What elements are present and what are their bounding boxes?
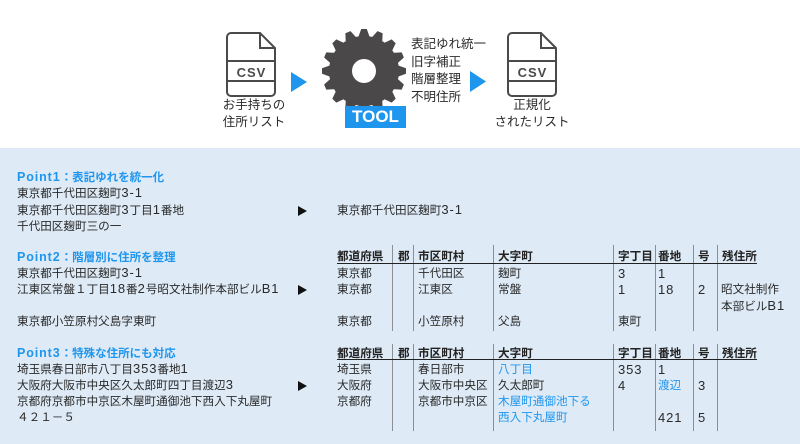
text: Point 2 third address: 東京都小笠原村父島字東町 (17, 315, 156, 328)
text: tool features: 表記ゆれ統一 (411, 37, 486, 51)
table: Point 3 result: 号 (698, 347, 710, 360)
table: Point 3 result: 1 (658, 362, 666, 377)
table: Point 2 result: 1 (618, 282, 626, 297)
text: Point 1 input addresses: 東京都千代田区麹町3-1 (17, 185, 143, 200)
label: TOOL (345, 106, 406, 128)
text: output caption: されたリスト (494, 115, 570, 129)
table: Point 3 result: 渡辺 (658, 379, 681, 392)
text: input caption (223, 98, 285, 129)
table: Point 3 result: 都道府県 (337, 347, 383, 360)
text: Point 1 input addresses: 千代田区麹町三の一 (17, 220, 121, 233)
table: Point 2 result: 1 (658, 266, 666, 281)
table: Point 3 result: 春日部市 (418, 363, 464, 376)
table: Point 3 result: 353 (618, 362, 642, 377)
table: Point 2 result: 都道府県 (337, 250, 383, 263)
table: Point 2 result: 父島 (498, 315, 521, 328)
table: Point 2 result (337, 245, 785, 331)
table: Point 3 result: 久太郎町 (498, 379, 544, 392)
text: Point 1 input addresses: 東京都千代田区麹町3丁目1番地 (17, 202, 184, 216)
table: Point 3 result: 木屋町通御池下る (498, 395, 591, 408)
icon: CSV output file: CSV (518, 65, 547, 80)
text: Point 1 result: 東京都千代田区麹町3-1 (337, 202, 463, 217)
table: Point 3 result: 4 (618, 378, 626, 393)
table: Point 2 result: 東京都 (337, 283, 372, 296)
section: Point 2 (17, 245, 785, 331)
table: Point 2 result: 常盤 (498, 283, 521, 296)
text: output caption (494, 98, 570, 129)
table: Point 2 result: 字丁目 (618, 250, 653, 263)
text: tool features: 不明住所 (411, 90, 461, 104)
icon: CSV output file (507, 32, 557, 97)
table: Point 2 result: 麹町 (498, 267, 521, 280)
table: Point 2 result: 2 (698, 282, 706, 297)
table: Point 3 result: 八丁目 (498, 363, 533, 376)
section: Point 1 (17, 170, 463, 233)
text: Point 2 second address: 江東区常盤１丁目18番2号昭文社制作本部ビルB1 (17, 281, 279, 296)
arrow: Point 3 (298, 381, 307, 391)
icon: CSV input file (226, 32, 276, 97)
table: Point 3 result: 市区町村 (418, 347, 464, 360)
table: Point 2 result: 残住所 (722, 250, 757, 263)
panel: blue background band (0, 148, 800, 444)
section: Point 3 (17, 344, 757, 431)
text: Point 3 input addresses: ４２１－５ (17, 411, 75, 424)
table: Point 3 result: 京都府 (337, 395, 372, 408)
table: Point 3 result: 郡 (398, 347, 410, 360)
table: Point 2 result: 千代田区 (418, 267, 464, 280)
arrow: Point 2 (298, 285, 307, 295)
table: Point 3 result: 埼玉県 (337, 363, 372, 376)
table: Point 3 result: 京都市中京区 (418, 395, 488, 408)
text: Point 3 input addresses: 京都府京都市中京区木屋町通御池下西入下丸屋町 (17, 395, 272, 408)
table: Point 2 result: 本部ビルB1 (721, 298, 785, 313)
heading: Point 2: Point2：階層別に住所を整理 (17, 250, 176, 264)
table: Point 3 result: 大阪府 (337, 379, 372, 392)
table: Point 2 result: 東町 (618, 315, 641, 328)
label: TOOL: TOOL (352, 107, 399, 126)
text: Point 3 input addresses: 大阪府大阪市中央区久太郎町四丁目渡辺3 (17, 377, 234, 392)
table: Point 2 result: 小笠原村 (418, 315, 464, 328)
text: tool features: 旧字補正 (411, 55, 461, 69)
table: Point 3 result: 番地 (658, 347, 681, 360)
table: Point 3 result: 西入下丸屋町 (498, 411, 568, 424)
text: output caption: 正規化 (513, 98, 551, 112)
text: input caption: お手持ちの (223, 98, 285, 112)
heading: Point 3: Point3：特殊な住所にも対応 (17, 346, 176, 360)
text: tool features (411, 37, 486, 104)
table: Point 2 result: 大字町 (498, 250, 533, 263)
arrow: tool to output (470, 71, 486, 92)
text: Point 3 input addresses (17, 361, 272, 424)
table: Point 2 result: 番地 (658, 250, 681, 263)
text: tool features: 階層整理 (411, 72, 461, 86)
table: Point 3 result: 大阪市中央区 (418, 379, 488, 392)
table: Point 2 result: 郡 (398, 250, 410, 263)
table: Point 3 result: 残住所 (722, 347, 757, 360)
heading: Point 1: Point1：表記ゆれを統一化 (17, 170, 164, 184)
table: Point 2 result: 江東区 (418, 283, 453, 296)
table: Point 3 result: 5 (698, 410, 706, 425)
arrow: input to tool (291, 72, 307, 92)
table: Point 3 result: 421 (658, 410, 682, 425)
text: Point 2 first address: 東京都千代田区麹町3-1 (17, 265, 143, 280)
icon: CSV input file: CSV (237, 65, 266, 80)
text: Point 1 input addresses (17, 185, 184, 233)
text: Point 3 input addresses: 埼玉県春日部市八丁目353番地1 (17, 361, 189, 376)
table: Point 2 result: 東京都 (337, 267, 372, 280)
table: Point 2 result: 昭文社制作 (721, 283, 779, 296)
table: Point 2 result: 3 (618, 266, 626, 281)
table: Point 2 result: 18 (658, 282, 674, 297)
icon: gear (322, 29, 406, 106)
table: Point 2 result: 市区町村 (418, 250, 464, 263)
text: input caption: 住所リスト (223, 115, 285, 129)
table: Point 3 result: 字丁目 (618, 347, 653, 360)
table: Point 3 result (337, 344, 757, 431)
table: Point 2 result: 東京都 (337, 315, 372, 328)
table: Point 3 result: 3 (698, 378, 706, 393)
arrow: Point 1 (298, 206, 307, 216)
table: Point 2 result: 号 (698, 250, 710, 263)
table: Point 3 result: 大字町 (498, 347, 533, 360)
